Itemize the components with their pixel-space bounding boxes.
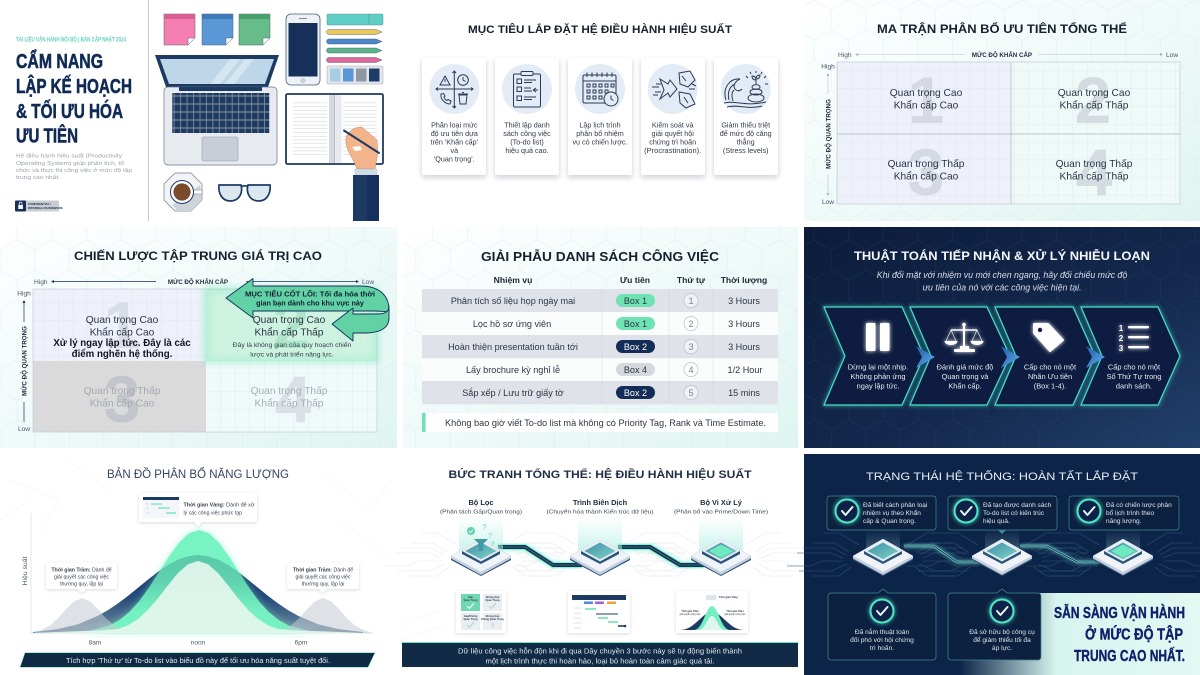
stage heading: processor: [674, 498, 768, 516]
panel: installation goals: [403, 0, 798, 221]
cover eyebrow: TÀI LIỆU VẬN HÀNH NỘI BỘ | BẢN CẬP NHẬT 2024: [16, 36, 126, 44]
axis: urgency: MỨC ĐỘ KHẨN CẤP: [168, 278, 228, 286]
overlap band: [92, 555, 306, 630]
thumbnail: mini energy curve: [676, 591, 748, 633]
cover title: & TỐI ƯU HÓA: [16, 99, 123, 123]
panel title: TRẠNG THÁI HỆ THỐNG: HOÀN TẤT LẮP ĐẶT: [866, 469, 1138, 483]
icon: smartphone: [286, 14, 320, 85]
status box 2: hiệu quả.: [983, 518, 1010, 525]
row 1: Phân tích số liệu họp ngày mai: [451, 296, 575, 306]
card text: Kiểm soát và: [652, 120, 693, 130]
status box 5: [948, 589, 1041, 660]
status box 4: đối phó với hội chứng: [850, 635, 914, 644]
quadrant 2 focus: lược và phát triển năng lực.: [250, 350, 334, 358]
status box 2: To-do list có kiến trúc: [983, 508, 1045, 517]
thumbnail: priority grid: Gấp: [468, 596, 473, 599]
callout: right down time: giải quyết các công việc: [295, 574, 351, 580]
axis: urgency: High: [838, 52, 852, 59]
card text: (Stress levels): [723, 146, 768, 155]
quadrant 4: Khẩn cấp Thấp: [1060, 170, 1129, 182]
x axis labels: [89, 640, 308, 646]
thumbnail: priority grid: Quan Trọng: [463, 599, 478, 602]
callout: right down time: thường quy, lặp lại: [302, 582, 344, 588]
confidential badge: CONFIDENTIAL /: [28, 202, 51, 206]
step 4 text: [1107, 362, 1161, 390]
cover title: ƯU TIÊN: [16, 124, 78, 148]
axis: urgency: MỨC ĐỘ KHẨN CẤP: [972, 51, 1032, 59]
status box 2: Đã tạo được danh sách: [983, 502, 1052, 509]
row 4: 4: [688, 365, 694, 375]
icon: coffee cup: [164, 173, 202, 211]
step 1 text: [848, 362, 908, 390]
status box 1: [827, 496, 936, 530]
row 1: [451, 294, 760, 308]
quadrant 3: Quan trọng Thấp: [888, 158, 965, 170]
thumbnail: priority grid: ?: [491, 624, 495, 630]
step 4 text: Số Thứ Tự trong: [1107, 372, 1161, 381]
cover description: Operating System) giúp phân tích, tổ: [16, 160, 125, 167]
chip 2: [972, 530, 1032, 576]
card text: [720, 120, 772, 155]
step 2 text: Khẩn cấp.: [948, 382, 982, 390]
card text: để mức độ căng: [720, 129, 772, 138]
row 5: 15 mins: [728, 388, 760, 398]
quadrant 3 faded: Khẩn cấp Cao: [90, 398, 155, 410]
stage heading: compiler: (Chuyển hóa thành Kiến trúc dữ liệu): [546, 508, 654, 516]
axis lines: [31, 513, 374, 633]
step 2 chevron: [910, 307, 1010, 405]
card: schedule: [568, 58, 632, 175]
quadrant 2 focus: 2: [273, 288, 309, 362]
icon: clipboard checklist: [514, 72, 540, 107]
panel: to-do list anatomy: [403, 227, 798, 448]
card text: trên 'Khẩn cấp': [431, 138, 479, 146]
y axis label: Hiệu suất: [20, 557, 29, 585]
step 2 text: Đánh giá mức độ: [937, 362, 993, 372]
stage heading: processor: Bộ Vi Xử Lý: [700, 498, 743, 507]
table header: Thời lượng: [721, 275, 767, 285]
thumbnail: mini energy curve: Thời gian Trầm: [726, 610, 744, 613]
quadrant 2 focus: [233, 288, 352, 362]
status box 4: Đã nắm thuật toán: [855, 627, 909, 636]
status box 1: cấp & Quan trọng.: [863, 516, 916, 525]
row 4: Lấy brochure kỳ nghỉ lễ: [466, 365, 560, 375]
card text: độ ưu tiên dựa: [431, 129, 478, 138]
cover description: trung cao nhất.: [16, 175, 60, 181]
panel title: MA TRẬN PHÂN BỔ ƯU TIÊN TỔNG THỂ: [877, 21, 1127, 36]
mint prime time curve: [69, 530, 329, 633]
axis: importance: [821, 64, 835, 206]
icon: pens and palette: [326, 14, 383, 84]
status box 3: [1069, 496, 1179, 530]
stage heading: processor: (Phân bổ vào Prime/Down Time): [674, 508, 768, 516]
axis: importance: Low: [18, 426, 30, 433]
chip 3: [1093, 530, 1153, 576]
icon: sticky notes: [164, 14, 270, 45]
stage heading: compiler: [546, 498, 654, 516]
right down time curve: [274, 598, 372, 633]
status box 2: [948, 496, 1057, 534]
callout: left down time: [46, 563, 117, 593]
card text: 'Quan trọng'.: [434, 154, 475, 164]
callout: left down time: giải quyết các công việc: [54, 574, 109, 580]
arrows between steps: [916, 346, 1105, 368]
thumbnail: mini energy curve: Thời gian Trầm: [681, 610, 699, 613]
step 1 chevron: [824, 307, 924, 405]
icon: open notebook: [286, 94, 383, 164]
icon: filter funnel and question marks: ?: [488, 533, 492, 540]
priority matrix grid: [837, 62, 1180, 209]
row 4: 1/2 Hour: [728, 365, 762, 375]
thumbnail: priority grid: Không Gấp: [486, 615, 500, 618]
icon: priority quadrant: [436, 71, 473, 108]
thumbnail: priority grid: Không Quan Trọng: [481, 618, 504, 621]
quadrant 3: [888, 135, 965, 209]
card: stress: [714, 58, 778, 175]
panel: overall priority matrix: [804, 0, 1200, 221]
step 3 text: (Box 1-4).: [1034, 382, 1066, 390]
quadrant 2: [1058, 63, 1131, 137]
quadrant 2: Khẩn cấp Thấp: [1060, 100, 1129, 112]
data pipeline connectors: [498, 547, 704, 565]
thumbnail: priority grid: Quan Trọng: [485, 599, 500, 602]
callout: prime time: [139, 493, 257, 527]
axis: importance: MỨC ĐỘ QUAN TRỌNG: [824, 99, 832, 169]
row 3: 3 Hours: [728, 342, 760, 352]
status box 4: trì hoãn.: [870, 645, 894, 652]
quadrant 1 focus: 1: [104, 288, 140, 362]
banner: integrate rank: [20, 653, 375, 667]
task table: [422, 275, 778, 404]
row 5: Sắp xếp / Lưu trữ giấy tờ: [462, 388, 564, 398]
readiness callout background: [960, 593, 1200, 675]
row 5: Box 2: [624, 388, 647, 398]
card text: thẳng: [737, 138, 755, 146]
chip: filter: [451, 517, 511, 576]
row 5: [462, 386, 760, 400]
table header: Nhiệm vụ: [494, 275, 532, 285]
status box 5: áp lực.: [992, 645, 1012, 652]
quadrant 2: Quan trọng Cao: [1058, 88, 1131, 99]
quadrant 3 faded: Quan trọng Thấp: [84, 385, 161, 397]
subtitle: Khi đối mặt với nhiệm vụ mới chen ngang, hãy đối chiếu mức độ: [877, 270, 1127, 280]
callout: prime time: lý các công việc phức tạp: [184, 510, 242, 516]
status box 4: [828, 589, 936, 660]
axis: importance: MỨC ĐỘ QUAN TRỌNG: [20, 326, 28, 396]
energy curve chart: [20, 513, 374, 646]
callout: right down time: [287, 563, 359, 593]
step 1 text: Không phản ứng: [850, 372, 906, 381]
card: classify priorities: [422, 58, 486, 175]
left down time curve: [33, 598, 131, 633]
row 3: [448, 340, 760, 354]
cover title: [16, 50, 132, 148]
connectors: [904, 546, 1100, 562]
quadrant 4: 4: [1076, 135, 1113, 209]
callout: left down time: thường quy, lặp lại: [60, 582, 103, 588]
icon: glasses: [219, 185, 270, 201]
icon: breaking barrier: [652, 71, 696, 108]
quadrant 3 faded: [84, 362, 161, 436]
step 1 text: ngay lập tức.: [857, 382, 899, 390]
quadrant 2 focus: Quan trọng Cao: [253, 315, 326, 326]
quadrant 4 faded: 4: [275, 362, 312, 436]
step 3 chevron: [995, 307, 1095, 405]
status box 1: nhiệm vụ theo Khẩn: [863, 509, 921, 517]
x axis labels: noon: [191, 640, 206, 646]
quadrant 3 faded: 3: [104, 362, 140, 436]
row 3: Box 2: [624, 342, 647, 352]
axis: importance: [17, 290, 31, 433]
chip 1: [853, 530, 913, 576]
row 2: Box 1: [624, 319, 647, 329]
stage heading: compiler: Trình Biên Dịch: [573, 498, 628, 507]
thumbnail: priority grid: Quan Trọng: [463, 618, 478, 621]
x axis labels: 6pm: [295, 640, 308, 646]
step 2 text: Quan trọng và: [942, 372, 989, 381]
icon: hand writing with pen: [344, 127, 379, 221]
panel: big picture pipeline: [385, 454, 817, 675]
table header: [494, 275, 767, 285]
quadrant 4: [1056, 135, 1133, 209]
row 1: Box 1: [624, 296, 647, 306]
quadrant 1 focus: Khẩn cấp Cao: [90, 326, 155, 338]
row 3: 3: [688, 342, 694, 352]
subtitle: [877, 270, 1127, 292]
highlighted quadrant glow: [207, 290, 376, 360]
axis: importance: High: [821, 64, 835, 70]
card text: phân bổ nhiệm: [576, 129, 624, 138]
mini gantt thumbnail: [143, 497, 179, 518]
stage heading: filter: (Phân tách Gấp/Quan trọng): [440, 510, 522, 516]
cover description: Hệ điều hành hiệu suất (Productivity: [16, 154, 122, 160]
chip: compiler: [570, 517, 630, 576]
card text: Phân loại mức: [431, 120, 478, 130]
step 3 text: [1024, 362, 1076, 390]
cover title: CẨM NANG: [16, 50, 103, 73]
cover description: chức và thực thi công việc ở mức độ tập: [16, 167, 133, 174]
quadrant 1: Quan trọng Cao: [890, 88, 963, 99]
inner light curve: [33, 561, 363, 633]
axis: urgency: Low: [362, 279, 374, 286]
chip: processor: [691, 517, 751, 576]
row 3: Hoàn thiện presentation tuần tới: [448, 342, 578, 352]
banner: summary: [402, 642, 798, 667]
callout: right down time: Thời gian Trầm: Dành để: [293, 566, 353, 574]
status box 3: Đã có chiến lược phân: [1106, 500, 1172, 509]
quadrant 1 focus: Quan trọng Cao: [86, 315, 159, 326]
icon: numbered list: 3: [1119, 344, 1124, 353]
card: to-do list: [495, 58, 559, 175]
banner: summary: Dữ liệu công việc hỗn độn khi đi qua Dây chuyền 3 bước này sẽ tự động biến thành: [458, 646, 742, 656]
step 4 text: Cấp cho nó một: [1108, 362, 1160, 372]
stage heading: filter: [440, 498, 522, 516]
card text: vụ có chiến lược.: [572, 138, 628, 146]
quadrant 3: 3: [908, 135, 944, 209]
icon: numbered list: 1: [1119, 324, 1124, 333]
circuit traces: [787, 533, 1200, 576]
axis: urgency: [34, 278, 374, 286]
stage heading: filter: Bộ Lọc: [468, 498, 494, 507]
panel title: THUẬT TOÁN TIẾP NHẬN & XỬ LÝ NHIỄU LOẠN: [854, 249, 1150, 263]
arrow: core objective U-turn: [226, 278, 389, 341]
card text: (Procrastination).: [644, 146, 701, 155]
panel: cover: [0, 0, 397, 221]
table header: Thứ tự: [677, 275, 706, 285]
callout: rule reminder: Không bao giờ viết To-do list mà không có Priority Tag, Rank và Time Estimate.: [445, 418, 766, 428]
row 2: [473, 316, 760, 330]
card text: [503, 120, 551, 155]
readiness statement: [1054, 604, 1185, 665]
callout: rule reminder: [422, 413, 778, 432]
step 4 chevron: [1081, 307, 1180, 405]
readiness statement: Ở MỨC ĐỘ TẬP: [1085, 626, 1183, 644]
card text: [572, 120, 628, 146]
icon: filter funnel and question marks: ?: [491, 542, 495, 548]
axis: importance: Low: [822, 199, 834, 206]
panel: interruption algorithm: [804, 227, 1200, 448]
icon: wave and stones: [724, 71, 768, 107]
quadrant 3: Khẩn cấp Cao: [894, 170, 959, 182]
row 2: Lọc hồ sơ ứng viên: [473, 319, 551, 329]
thumbnail: gantt: [568, 591, 630, 633]
card text: chứng trì hoãn: [649, 138, 696, 146]
icon: laptop: [155, 55, 279, 165]
status box 3: bổ lịch trình theo: [1106, 509, 1154, 517]
step 3 text: Nhãn Ưu tiên: [1028, 372, 1072, 381]
quadrant 2: 2: [1075, 63, 1111, 137]
status box 1: Đã biết cách phân loại: [863, 500, 927, 509]
card text: [431, 120, 479, 164]
row 5: 5: [688, 388, 694, 398]
card text: giải quyết hội: [652, 129, 694, 138]
card text: (To-do list): [510, 138, 544, 146]
status box 5: để giảm thiểu tối đa: [973, 635, 1031, 644]
panel title: GIẢI PHẪU DANH SÁCH CÔNG VIỆC: [481, 249, 719, 264]
thumbnail: priority grid: Gấp/Không: [464, 615, 478, 618]
panel title: BẢN ĐỒ PHÂN BỔ NĂNG LƯỢNG: [107, 468, 289, 481]
step 1 text: Dừng lại một nhịp.: [848, 362, 908, 372]
icon: pause: [866, 323, 890, 351]
quadrant 2 focus: Đây là không gian của quy hoạch chiến: [233, 340, 352, 349]
cover description: [16, 154, 133, 181]
quadrant 1: [890, 63, 963, 137]
subtitle: ưu tiên của nó với các công việc hiện tại.: [922, 282, 1082, 292]
step 2 text: [937, 362, 993, 390]
card: procrastination: [641, 58, 705, 175]
card text: sách công việc: [503, 129, 551, 138]
status box 3: năng lượng.: [1106, 518, 1142, 525]
card text: Thiết lập danh: [504, 120, 550, 130]
axis: importance: High: [17, 290, 31, 298]
circuit traces: [385, 533, 817, 576]
icon: price tag: [1034, 324, 1063, 351]
strategy matrix: [33, 288, 377, 436]
icon: numbered list: 2: [1119, 334, 1124, 343]
icon: numbered list: [1119, 324, 1149, 353]
icon: filter funnel and question marks: [467, 523, 495, 551]
panel title: MỤC TIÊU LẮP ĐẶT HỆ ĐIỀU HÀNH HIỆU SUẤT: [468, 23, 732, 36]
quadrant 1 focus: điểm nghẽn hệ thống.: [72, 349, 173, 360]
step 4 text: danh sách.: [1116, 382, 1152, 390]
icon: balance scale: [944, 323, 984, 352]
row 1: 3 Hours: [728, 296, 760, 306]
row 1: 1: [688, 296, 694, 306]
card text: và: [451, 146, 458, 155]
thumbnail: mini energy curve: Thời gian Vàng: [719, 595, 738, 599]
card text: Lập lịch trình: [579, 120, 621, 130]
panel: energy allocation map: [0, 454, 397, 675]
cover title: LẬP KẾ HOẠCH: [16, 74, 132, 98]
thumbnail: mini energy curve: giải quyết công việc: [724, 613, 746, 616]
quadrant 4: Quan trọng Thấp: [1056, 158, 1133, 170]
panel: high value focus strategy: [0, 227, 397, 448]
quadrant 1: 1: [908, 63, 944, 137]
quadrant 2 focus: Khẩn cấp Thấp: [255, 326, 324, 338]
card text: hiệu quả cao.: [505, 146, 549, 155]
banner: integrate rank: Tích hợp 'Thứ tự' từ To-do list vào biểu đồ này để tối ưu hóa năng suất tuyệt đối.: [66, 656, 330, 665]
arrow: core objective U-turn: MỤC TIÊU CỐT LÕI: Tối đa hóa thời: [245, 288, 375, 298]
step 3 text: Cấp cho nó một: [1024, 362, 1076, 372]
table header: Ưu tiên: [620, 275, 650, 285]
panel title: BỨC TRANH TỔNG THỂ: HỆ ĐIỀU HÀNH HIỆU SUẤT: [448, 468, 752, 481]
thumbnail: priority grid: Không Gấp: [486, 596, 500, 599]
quadrant 4 faded: [251, 362, 328, 436]
row 4: [466, 362, 762, 376]
panel title: CHIẾN LƯỢC TẬP TRUNG GIÁ TRỊ CAO: [74, 248, 322, 263]
quadrant 4 faded: Khẩn cấp Thấp: [255, 398, 324, 410]
callout: prime time: Thời gian Vàng: Dành để xử: [184, 502, 255, 508]
axis: urgency: High: [34, 279, 48, 286]
card text: [644, 120, 701, 155]
banner: summary: một lịch trình thực thi hoàn hảo, loại bỏ hoàn toàn cảm giác quá tải.: [486, 656, 714, 666]
quadrant 1 focus: [53, 288, 191, 362]
x axis labels: 8am: [89, 640, 102, 646]
quadrant 1: Khẩn cấp Cao: [894, 100, 959, 112]
callout: left down time: Thời gian Trầm: Dành để: [51, 566, 112, 574]
confidential badge: INTERNAL FRAMEWORK: [28, 206, 64, 210]
icon: calendar with clock: [583, 72, 618, 106]
thumbnail: mini energy curve: giải quyết công việc: [680, 613, 701, 616]
row 2: 2: [688, 319, 694, 329]
card text: Giảm thiểu triệt: [721, 120, 770, 130]
confidential badge: [15, 200, 64, 212]
axis: urgency: [838, 51, 1178, 59]
icon: filter funnel and question marks: ?: [482, 523, 487, 532]
quadrant 4 faded: Quan trọng Thấp: [251, 385, 328, 397]
row 4: Box 4: [624, 365, 647, 375]
arrow: core objective U-turn: gian bạn dành cho khu vực này: [256, 298, 364, 308]
navy energy curve: [33, 555, 363, 633]
quadrant 1 focus: Xử lý ngay lập tức. Đây là các: [53, 338, 191, 349]
axis: urgency: Low: [1166, 52, 1178, 59]
thumbnail: priority grid: [456, 591, 506, 633]
status box 5: Đã sở hữu bộ công cụ: [969, 628, 1035, 636]
row 2: 3 Hours: [728, 319, 760, 329]
panel: system status: [787, 454, 1200, 675]
